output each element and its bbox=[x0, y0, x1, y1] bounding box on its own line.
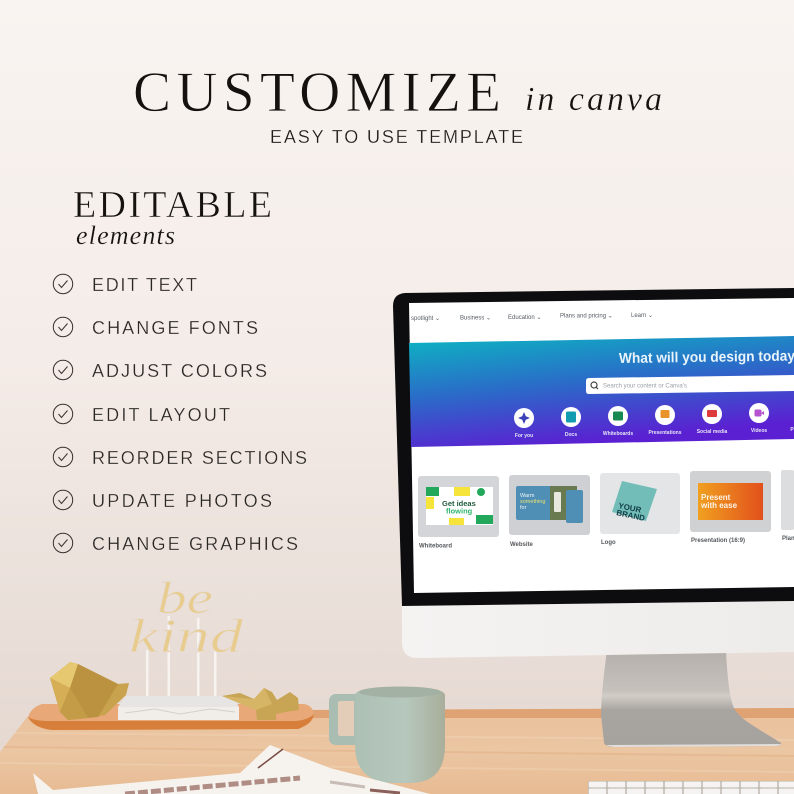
monitor stand bbox=[601, 650, 781, 747]
card: website: something bbox=[520, 499, 545, 505]
category icons: Docs bbox=[565, 432, 577, 438]
card: presentation: with ease bbox=[700, 501, 738, 510]
title: CUSTOMIZE bbox=[133, 61, 501, 124]
item: edit layout: EDIT LAYOUT bbox=[92, 405, 230, 425]
item: reorder sections: REORDER SECTIONS bbox=[92, 448, 307, 468]
card: planner bbox=[781, 470, 794, 542]
monitor screen bbox=[409, 298, 794, 593]
sign: be kind bbox=[129, 572, 244, 698]
item: edit text: EDIT TEXT bbox=[92, 275, 197, 295]
card: website: for bbox=[520, 505, 527, 511]
checklist bbox=[53, 274, 307, 554]
search box: Search your content or Canva's bbox=[603, 384, 687, 390]
card: website bbox=[509, 475, 590, 548]
category icons: Presentations bbox=[648, 430, 682, 436]
card: logo bbox=[600, 473, 680, 546]
newspaper bbox=[33, 745, 430, 794]
keyboard bbox=[588, 781, 794, 794]
card: whiteboard: flowing bbox=[446, 506, 473, 516]
card: presentation bbox=[690, 471, 771, 544]
heading: editable elements: elements bbox=[76, 221, 175, 250]
monitor chin bbox=[402, 596, 794, 658]
card: logo: BRAND bbox=[616, 508, 646, 523]
gold geometric bird bbox=[50, 662, 129, 720]
hero gradient band bbox=[409, 336, 794, 447]
navigation bar: Education ⌄ bbox=[508, 315, 541, 321]
marble base bbox=[118, 696, 239, 720]
item: adjust colors: ADJUST COLORS bbox=[92, 361, 267, 381]
card: presentation: Present bbox=[701, 493, 731, 502]
card: whiteboard: Whiteboard bbox=[419, 544, 452, 550]
card: logo: YOUR bbox=[618, 501, 642, 515]
category icons: Whiteboards bbox=[603, 431, 633, 437]
title: in canva bbox=[525, 81, 662, 118]
card: whiteboard: Get ideas bbox=[442, 499, 476, 508]
heading: editable elements bbox=[73, 184, 272, 250]
title bbox=[133, 61, 662, 124]
item: change fonts: CHANGE FONTS bbox=[92, 318, 258, 338]
sign: be kind: be bbox=[157, 572, 213, 623]
subtitle: EASY TO USE TEMPLATE bbox=[270, 127, 523, 147]
navigation bar: Plans and pricing ⌄ bbox=[560, 314, 613, 320]
heading: editable elements: EDITABLE bbox=[73, 184, 272, 226]
category icons bbox=[514, 403, 794, 439]
search box bbox=[586, 375, 794, 394]
navigation bar: Learn ⌄ bbox=[631, 313, 653, 319]
mug bbox=[329, 686, 445, 783]
category icons: Social media bbox=[697, 429, 727, 435]
navigation bar: spotlight ⌄ bbox=[411, 316, 440, 322]
tray bbox=[28, 704, 314, 730]
category icons: Videos bbox=[751, 428, 767, 434]
navigation bar bbox=[411, 313, 653, 322]
navigation bar: Business ⌄ bbox=[460, 316, 491, 322]
card: website: Website bbox=[510, 542, 534, 548]
gold bird figurine bbox=[222, 688, 299, 720]
category icons: For you bbox=[515, 433, 533, 439]
card: presentation: Presentation (16:9) bbox=[691, 538, 745, 544]
item: update photos: UPDATE PHOTOS bbox=[92, 491, 272, 511]
item: change graphics: CHANGE GRAPHICS bbox=[92, 534, 298, 554]
monitor bezel bbox=[393, 288, 794, 606]
card: whiteboard bbox=[418, 476, 499, 550]
card: website: Warm bbox=[520, 493, 535, 499]
desk bbox=[0, 708, 794, 794]
sign: be kind: kind bbox=[129, 610, 244, 663]
card: logo: Logo bbox=[601, 540, 616, 546]
